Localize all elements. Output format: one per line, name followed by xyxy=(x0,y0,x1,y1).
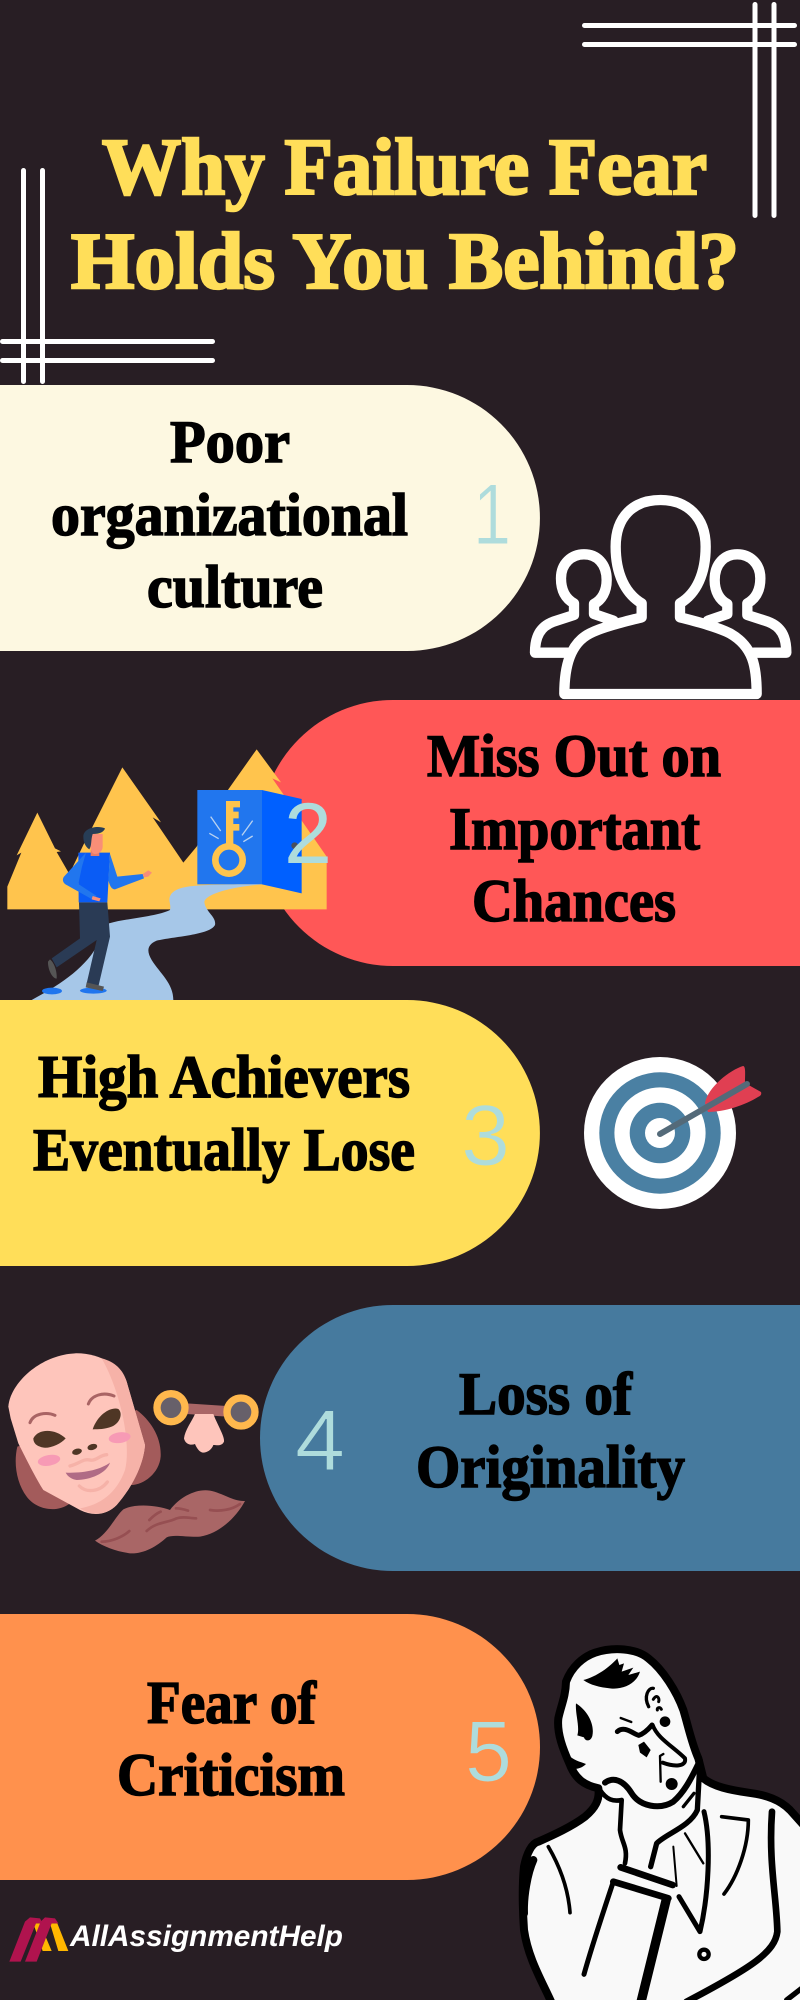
walking man xyxy=(42,827,152,994)
glasses and nose xyxy=(157,1394,255,1453)
title: Why Failure Fear xyxy=(102,124,707,212)
illustration: man walking to door with key xyxy=(7,749,327,1000)
panel 2 text: Important xyxy=(449,796,700,862)
moustache xyxy=(95,1490,245,1553)
panel 1: poor organizational culture xyxy=(0,385,540,651)
hand, cuff and suit details xyxy=(524,1761,800,2000)
illustration: mask, glasses-nose and moustache xyxy=(8,1353,255,1553)
panel 4 text xyxy=(416,1361,685,1500)
title xyxy=(71,124,739,306)
decorative lines: left of title xyxy=(0,168,215,384)
panel 1 text: culture xyxy=(147,554,323,620)
panel 3: high achievers eventually lose xyxy=(0,1000,540,1266)
panel 2: miss out on important chances xyxy=(260,700,800,966)
panel 3 text: High Achievers xyxy=(38,1044,410,1110)
trees xyxy=(7,749,327,909)
panel 2 text: Miss Out on xyxy=(427,723,721,789)
panel 1 text: organizational xyxy=(51,482,408,548)
panel 2 text: Chances xyxy=(472,868,676,934)
number 5: 5 xyxy=(465,1704,512,1800)
panel 5 text xyxy=(117,1670,345,1808)
mask xyxy=(8,1353,161,1514)
number 1: 1 xyxy=(473,467,511,563)
panel 1 text: Poor xyxy=(170,409,290,475)
panel 3 text xyxy=(33,1044,415,1183)
illustration: thinking man xyxy=(523,1649,800,2000)
panel 3 text: Eventually Lose xyxy=(33,1117,415,1183)
panel 4: loss of originality xyxy=(260,1305,800,1571)
face details xyxy=(566,1658,700,1807)
panel 2 text xyxy=(427,723,721,934)
panel 5: fear of criticism xyxy=(0,1614,540,1880)
icon: group of people xyxy=(535,500,786,694)
title: Holds You Behind? xyxy=(71,218,739,306)
decorative lines: top right xyxy=(582,2,797,218)
open door with key xyxy=(197,790,302,893)
icon: target with arrow xyxy=(584,1057,761,1209)
number 2: 2 xyxy=(284,786,332,882)
panel 4 text: Loss of xyxy=(459,1361,633,1427)
logo: AllAssignmentHelp xyxy=(9,1917,343,1962)
logo text: AllAssignmentHelp xyxy=(69,1920,343,1953)
body and head outline xyxy=(523,1649,800,2000)
number 3: 3 xyxy=(461,1088,510,1184)
panel 5 text: Fear of xyxy=(147,1670,317,1736)
panel 5 text: Criticism xyxy=(117,1742,345,1808)
panel 4 text: Originality xyxy=(416,1434,685,1500)
logo mark xyxy=(9,1917,68,1962)
winding path xyxy=(32,884,262,1000)
panel 1 text xyxy=(51,409,408,620)
number 4: 4 xyxy=(295,1393,345,1489)
